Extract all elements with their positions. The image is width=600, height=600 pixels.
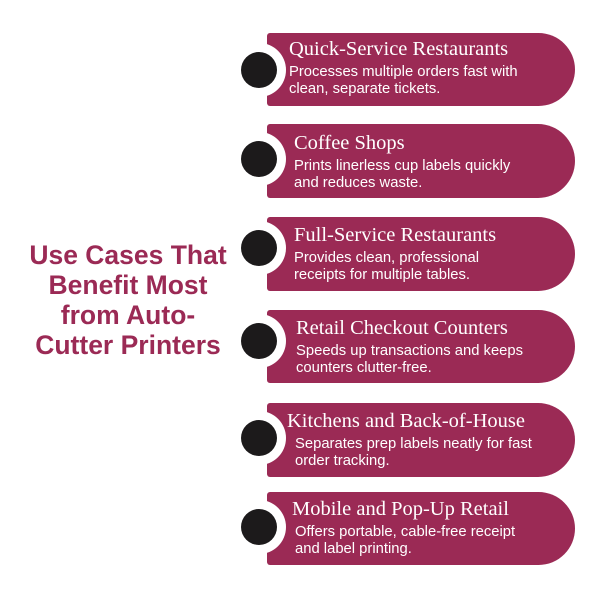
title: Benefit Most — [48, 270, 208, 300]
card: quick-service restaurants: Quick-Service Restaurants — [289, 38, 508, 60]
card: mobile and pop-up retail: Mobile and Pop-Up Retail — [292, 498, 509, 520]
card: mobile and pop-up retail — [241, 492, 575, 565]
card: kitchens and back-of-house: Kitchens and Back-of-House — [287, 410, 525, 432]
title: Use Cases That — [29, 240, 227, 270]
card: kitchens and back-of-house: Separates prep labels neatly for fast order tracking. — [295, 436, 532, 469]
card: kitchens and back-of-house — [241, 403, 575, 477]
card: retail checkout counters: Retail Checkout Counters — [296, 317, 508, 339]
card: retail checkout counters — [241, 310, 575, 383]
card: quick-service restaurants — [241, 33, 575, 106]
card: retail checkout counters: Speeds up transactions and keeps counters clutter-free. — [296, 343, 523, 376]
card: full-service restaurants: Provides clean, professional receipts for multiple tables. — [294, 250, 479, 283]
title: from Auto- — [61, 300, 195, 330]
card: quick-service restaurants: Processes multiple orders fast with clean, separate tickets. — [289, 64, 518, 97]
card: coffee shops: Coffee Shops — [294, 132, 405, 154]
title — [29, 240, 227, 360]
card: mobile and pop-up retail: Offers portable, cable-free receipt and label printing. — [295, 524, 515, 557]
card: full-service restaurants: Full-Service Restaurants — [294, 224, 496, 246]
card: coffee shops — [241, 124, 575, 198]
card: full-service restaurants — [241, 217, 575, 291]
card: coffee shops: Prints linerless cup labels quickly and reduces waste. — [294, 158, 510, 191]
title: Cutter Printers — [35, 330, 221, 360]
